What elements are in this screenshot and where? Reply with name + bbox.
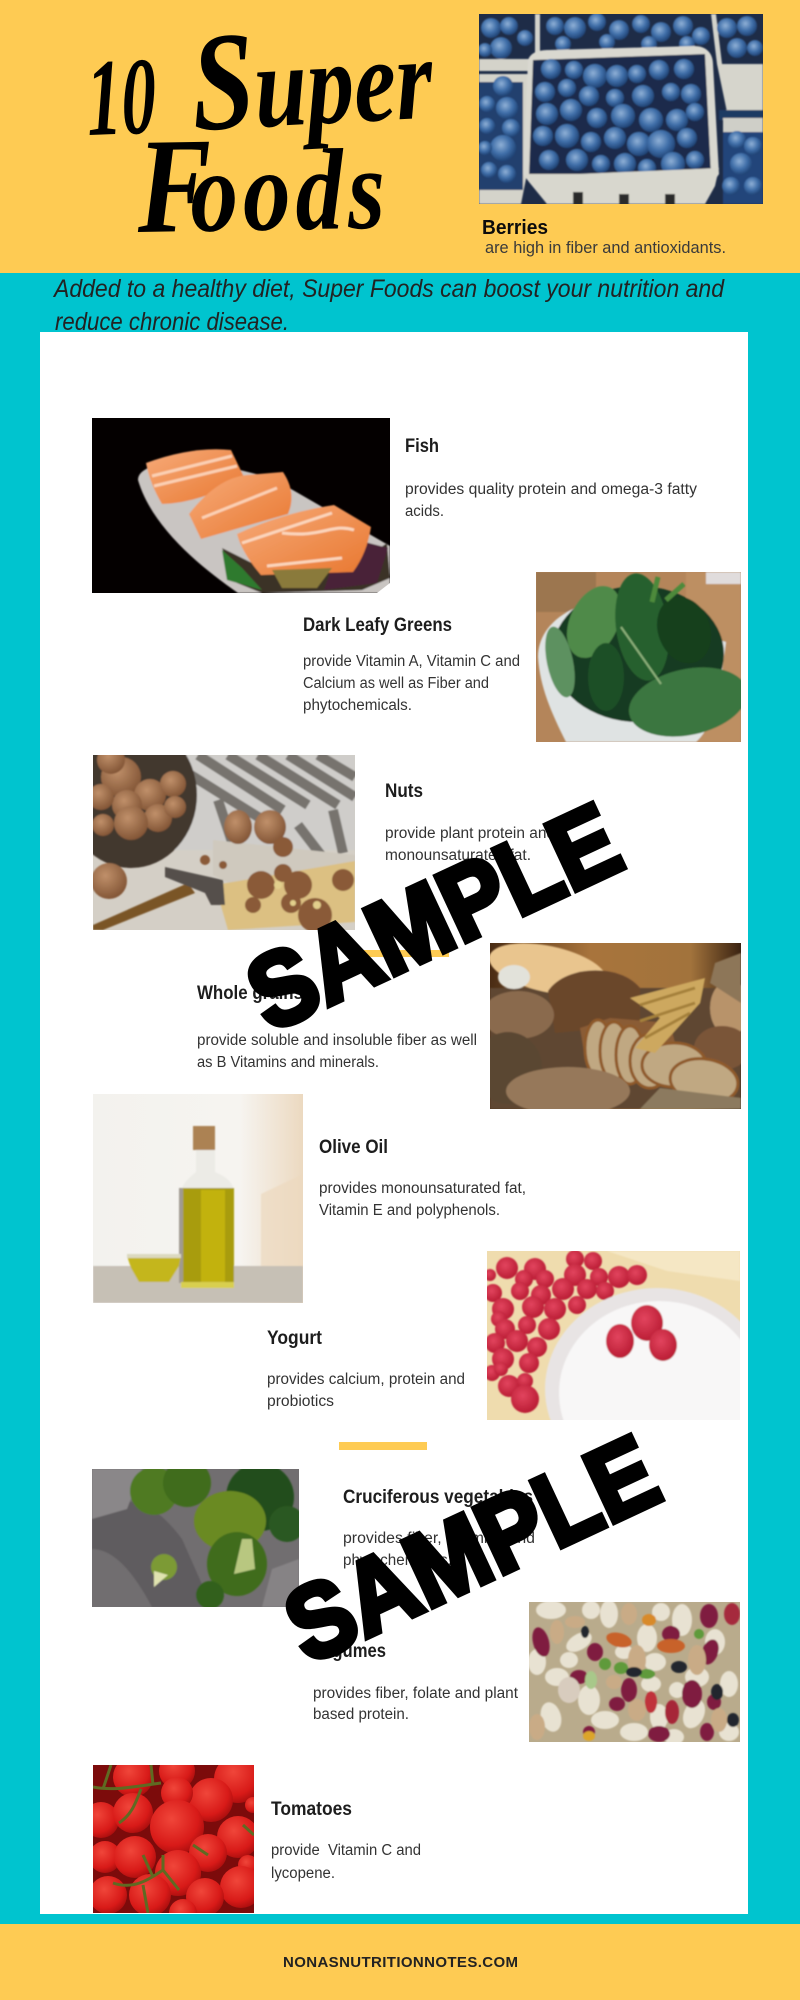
photo: broccoli <box>92 1469 299 1607</box>
heading: yogurt: Yogurt <box>267 1328 323 1349</box>
heading: olive oil: Olive Oil <box>319 1137 388 1158</box>
text: whole grains description <box>197 1032 477 1071</box>
item: olive oil <box>93 1094 526 1303</box>
text: introduction: reduce chronic disease. <box>55 308 289 336</box>
text: legumes description: based protein. <box>313 1706 409 1723</box>
title: 10 <box>85 35 158 159</box>
text: yogurt description <box>267 1371 465 1410</box>
text: olive oil description <box>319 1180 526 1219</box>
text: whole grains description: as B Vitamins and minerals. <box>197 1054 379 1071</box>
photo: mixed beans <box>529 1602 740 1742</box>
text: fish description <box>405 481 697 520</box>
text: introduction <box>52 275 725 336</box>
photo: tomatoes <box>93 1765 254 1913</box>
text: nuts description <box>385 825 555 864</box>
text: whole grains description: provide soluble and insoluble fiber as well <box>197 1032 477 1049</box>
heading: dark leafy greens: Dark Leafy Greens <box>303 615 452 636</box>
item: nuts <box>65 722 555 932</box>
text: yogurt description: probiotics <box>267 1393 334 1410</box>
text: berries caption <box>482 217 726 257</box>
text: legumes description <box>313 1685 519 1723</box>
heading: cruciferous vegetables: Cruciferous vegetables <box>343 1487 533 1508</box>
watermark: sample upper: SAMPLE <box>230 782 637 1054</box>
item: fish <box>92 418 697 593</box>
item: dark leafy greens <box>303 570 754 747</box>
item: legumes <box>313 1600 740 1745</box>
text: greens description: Calcium as well as Fiber and <box>303 675 489 692</box>
text: yogurt description: provides calcium, protein and <box>267 1371 465 1388</box>
heading: whole grains: Whole grains <box>197 983 303 1004</box>
text: legumes description: provides fiber, folate and plant <box>313 1685 519 1702</box>
text: introduction: Added to a healthy diet, Super Foods can boost your nutrition and <box>52 275 725 303</box>
title <box>85 0 437 262</box>
heading: fish: Fish <box>405 436 439 457</box>
text: fish description: acids. <box>405 503 444 520</box>
title: Super <box>188 0 437 161</box>
text: greens description <box>303 653 520 714</box>
text: cruciferous description <box>343 1530 535 1569</box>
text: berries caption: are high in fiber and antioxidants. <box>485 239 726 257</box>
title: Foods <box>135 106 391 262</box>
panel: white content area <box>40 332 748 1914</box>
heading: legumes: Legumes <box>313 1641 386 1662</box>
item: whole grains <box>197 934 750 1115</box>
text: berries caption: Berries <box>482 217 548 239</box>
text: nuts description: provide plant protein and <box>385 825 555 842</box>
text: greens description: provide Vitamin A, Vitamin C and <box>303 653 520 670</box>
photo: blueberries <box>479 14 763 204</box>
text: olive oil description: provides monounsaturated fat, <box>319 1180 526 1197</box>
text: tomatoes description <box>271 1842 421 1882</box>
photo: olive oil bottle <box>93 1094 303 1303</box>
text: greens description: phytochemicals. <box>303 697 412 714</box>
heading: nuts: Nuts <box>385 781 423 802</box>
text: tomatoes description: provide Vitamin C and <box>271 1842 421 1859</box>
text: fish description: provides quality protein and omega-3 fatty <box>405 481 697 498</box>
photo: salmon <box>92 418 390 593</box>
divider: yellow bar <box>339 1442 427 1450</box>
text: tomatoes description: lycopene. <box>271 1865 335 1882</box>
heading: tomatoes: Tomatoes <box>271 1799 352 1820</box>
text: olive oil description: Vitamin E and polyphenols. <box>319 1202 500 1219</box>
item: cruciferous vegetables <box>92 1459 535 1609</box>
item: tomatoes <box>83 1753 421 1927</box>
item: yogurt <box>267 1250 769 1490</box>
photo: spinach bowl <box>536 572 741 742</box>
text: cruciferous description: phytochemicals. <box>343 1552 452 1569</box>
photo: breads <box>490 943 741 1109</box>
photo: walnuts <box>93 755 355 930</box>
text: cruciferous description: provides fiber, vitamins and <box>343 1530 535 1547</box>
text: nuts description: monounsaturated fat. <box>385 847 531 864</box>
photo: yogurt and raspberries <box>487 1251 740 1420</box>
header band <box>0 0 800 273</box>
footer: website: NONASNUTRITIONNOTES.COM <box>283 1954 518 1971</box>
footer band <box>0 1924 800 2000</box>
divider: yellow bar <box>361 950 449 957</box>
watermark: sample lower: SAMPLE <box>268 1414 675 1686</box>
